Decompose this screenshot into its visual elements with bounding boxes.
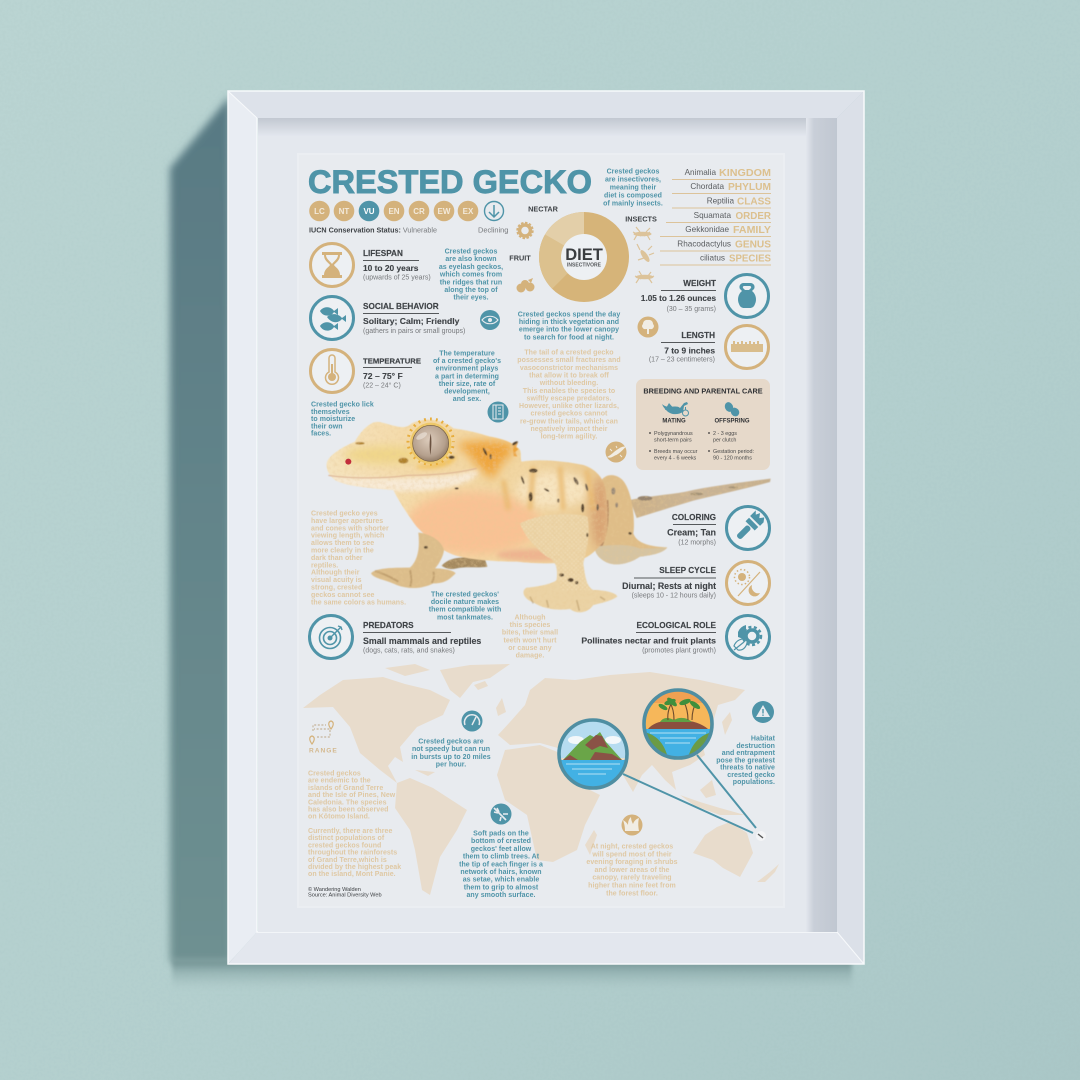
blurb: insectivores: diet is composed [604,192,662,200]
blurb: range: on Kōtomo Island. [308,814,370,821]
blurb: daytime hiding: to search for food at night. [524,334,614,341]
blurb: soft pads: bottom of crested [471,838,531,845]
blurb: range: Caledonia. The species [308,799,387,806]
icon: tree [638,316,658,338]
temperature [310,350,421,392]
taxonomy table: KINGDOM [719,167,771,179]
panel: breeding and parental care: MATING [662,418,686,424]
blurb: eye structure: viewing length, which [311,533,384,540]
torso and head [327,420,607,563]
blurb: docile nature: most tankmates. [437,614,493,621]
orange crest patch [457,441,515,480]
blurb: tail: re-grow their tails, which can [520,418,618,425]
blurb: night foraging: At night, crested geckos [591,844,673,850]
blurb: range: has also been observed [308,806,388,814]
care bullet lists: Polygynandrous [654,431,693,437]
care bullet lists [649,431,754,462]
blurb: threats: populations. [733,779,775,786]
blurb: tail: The tail of a crested gecko [524,350,614,356]
blurb: soft pads: Soft pads on the [473,830,529,838]
ecological role [581,616,770,658]
conservation status: Declining [478,226,508,234]
blurb: range: are endemic to the [308,778,371,785]
taxonomy table: ciliatus [700,254,725,262]
blurb: eye structure: and cones with shorter [311,525,389,532]
blurb: daytime hiding: emerge into the lower canopy [519,327,619,334]
blurb: threats: Habitat [751,736,776,742]
blurb: soft pads: the tip of each finger is a [459,861,543,868]
credits: © Wandering Walden [308,886,361,893]
taxonomy table: Squamata [694,211,731,220]
blurb: soft pads: network of hairs, known [460,869,542,876]
blurb: night foraging: the forest floor. [606,890,658,897]
blurb: temperature: a part in determing [435,373,499,380]
blurb: tail: negatively impact their [530,426,608,433]
blurb: docile nature: The crested geckos' [431,592,499,598]
blurb: self licking: faces. [311,431,331,438]
temperature: (22 – 24° C) [363,382,401,390]
blurb: tail: long-term agility. [541,434,597,441]
taxonomy table: Gekkonidae [685,225,729,234]
weight: WEIGHT [683,279,716,288]
panel: breeding and parental care: OFFSPRING [714,418,750,424]
blurb: temperature: development, [444,388,490,396]
tail [630,479,771,518]
blurb: eye structure: geckos cannot see [311,592,375,599]
body shading [329,441,609,561]
blurb: range: islands of Grand Terre [308,785,383,792]
diet labels and icons: FRUIT [509,254,531,262]
blurb: night foraging: evening foraging in shrubs [586,859,678,866]
blurb: soft pads: them to climb trees. At [463,854,540,861]
blurb: bites: Although [514,614,546,622]
blurb: eyelash geckos: Crested geckos [445,248,497,256]
icon: stork [662,402,688,416]
callout lines to New Caledonia [623,755,766,841]
blurb: bites: or cause any [508,645,552,652]
length: (17 – 23 centimeters) [649,356,715,364]
length: LENGTH [681,331,715,340]
blurb: self licking: Crested gecko lick [311,402,374,408]
blurb: docile nature: them compatible with [429,607,501,614]
ecological role: ECOLOGICAL ROLE [637,621,717,630]
picture frame [228,91,864,964]
blurb: eye structure: Crested gecko eyes [311,510,378,518]
range heading and icon [309,721,338,754]
icon: book [488,402,508,422]
ecological role: Pollinates nectar and fruit plants [581,636,716,646]
blurb: eye structure: the same colors as humans. [311,599,406,606]
predators: Small mammals and reptiles [363,636,481,646]
blurb: eyelash geckos: along the top of [444,287,498,294]
ecological role: (promotes plant growth) [642,648,716,654]
blurb: speed: not speedy but can run [412,746,490,753]
blurb: night foraging: higher than nine feet from [588,882,676,890]
blurb: range: on the island, Mont Panie. [308,871,396,878]
blurb: soft pads: as setae, which enable [463,877,539,884]
blurb: bites: damage. [516,652,544,660]
panel: breeding and parental care [636,379,770,470]
blurb: night foraging: and lower areas of the [594,867,670,874]
coloring: Cream; Tan [667,528,716,538]
predators: PREDATORS [363,621,414,630]
blurb: bites: teeth won't hurt [503,637,557,644]
diet labels and icons [509,204,657,292]
care bullet lists: short-term pairs [654,438,692,444]
taxonomy table: Animalia [685,168,716,177]
taxonomy table: Reptilia [707,196,734,206]
icon: gecko foot [490,804,512,824]
range heading and icon: RANGE [309,748,338,754]
blurb: eye structure: more clearly in the [311,548,374,554]
blurb: speed: in bursts up to 20 miles [411,754,491,761]
blurb: bites: bites, their small [502,630,558,637]
blurb: threats: and entrapment [722,750,776,757]
blurb: tail: without bleeding. [539,380,598,387]
blurb: daytime hiding: Crested geckos spend the day [518,312,620,318]
blurb: eyelash geckos: are also known [445,256,497,263]
nostril [345,459,351,465]
callout: island one [558,719,628,790]
near front leg [520,514,617,612]
length: 7 to 9 inches [664,346,715,356]
blurb: threats: crested gecko [727,772,775,779]
callout: island two [643,689,713,761]
blurb: tail: crested geckos cannot [531,411,608,418]
sleep cycle: (sleeps 10 - 12 hours daily) [632,592,716,600]
blurb: temperature: environment plays [436,366,498,373]
skin spots [355,441,738,584]
blurb: tail: vasoconstrictor mechanisms [520,365,618,372]
blurb: eyelash geckos: as eyelash geckos, [439,264,503,271]
lifespan: 10 to 20 years [363,263,419,273]
neck spikes [513,443,519,457]
coloring: COLORING [672,513,716,522]
world map [303,664,779,895]
blurb: threats: destruction [736,743,775,750]
blurb: tail: This enables the species to [523,388,615,395]
blurb: range: crested geckos found [308,842,381,849]
blurb: temperature: and sex. [453,396,481,403]
blurb: range: of Grand Terre,which is [308,857,387,864]
blurb: range: distinct populations of [308,835,385,842]
credits: Source: Animal Diversity Web [308,892,382,898]
care bullet lists: Gestation period: [713,449,754,455]
blurb: eyelash geckos: which comes from [439,272,502,279]
conservation status: EN [388,207,400,216]
blurb: soft pads: any smooth surface. [466,892,536,899]
weight: 1.05 to 1.26 ounces [641,294,716,303]
title: CRESTED GECKO [308,164,592,200]
blurb: threats: threats to native [720,764,775,772]
taxonomy table: SPECIES [729,252,771,264]
blurb: insectivores: of mainly insects. [603,200,663,208]
blurb: docile nature: docile nature makes [431,599,499,606]
blurb: self licking: themselves [311,409,350,416]
social behavior: SOCIAL BEHAVIOR [363,302,439,311]
coloring [667,506,770,550]
care bullet lists: every 4 - 6 weeks [654,456,697,462]
blurb: eye structure: visual acuity is [311,577,362,584]
care bullet lists: per clutch [713,438,736,444]
blurb: range: Currently, there are three [308,828,392,835]
blurb: night foraging: canopy, rarely traveling [592,875,672,882]
blurb: eye structure: have larger apertures [311,518,383,525]
blurb: insectivores: Crested geckos [607,168,659,176]
blurb: range: Crested geckos [308,770,361,778]
left front leg [371,533,456,588]
taxonomy table: ORDER [736,210,771,222]
conservation status: NT [339,207,349,216]
lifespan: (upwards of 25 years) [363,274,431,282]
care bullet lists: 90 - 120 months [713,456,752,462]
diet donut chart: DIET [565,246,603,264]
blurb: temperature: their size, rate of [439,381,496,388]
blurb: temperature: of a crested gecko's [433,358,501,365]
temperature: 72 – 75° F [363,371,403,381]
care bullet lists: Breeds may occur [654,449,698,455]
blurb: tail: However, unlike other lizards, [519,403,619,410]
icon: speedometer [462,710,482,732]
taxonomy table: Chordata [690,182,724,191]
social behavior: (gathers in pairs or small groups) [363,328,465,335]
diet labels and icons: INSECTS [625,214,657,224]
hind leg [595,475,667,564]
blurb: bites: this species [510,622,550,629]
sleep cycle: Diurnal; Rests at night [622,581,716,591]
coloring: (12 morphs) [678,540,716,546]
blurb: tail: that allow it to break off [529,372,610,379]
blurb: daytime hiding: hiding in thick vegetation and [519,319,619,326]
blurb: soft pads: them to grip to almost [464,884,539,891]
poster panel [299,155,783,906]
diet donut chart: INSECTIVORE [567,262,602,268]
blurb: night foraging: will spend most of their [591,851,672,858]
taxonomy table: PHYLUM [728,181,771,193]
gecko illustration [327,419,771,612]
blurb: range: throughout the rainforests [308,850,397,857]
blurb: eye structure: reptiles. [311,562,338,569]
blurb: eye structure: dark than other [311,555,363,562]
weight: (30 – 35 grams) [667,306,716,313]
conservation status [309,201,508,234]
far front leg [442,557,487,569]
blurb: eye structure: Although their [311,570,360,577]
blurb: speed: Crested geckos are [418,738,484,746]
eye [410,423,451,464]
temperature: TEMPERATURE [363,356,421,366]
predators [310,616,481,658]
conservation status: IUCN Conservation Status: Vulnerable [309,226,437,234]
care bullet lists: 2 - 3 eggs [713,431,737,437]
conservation status: LC [314,207,325,216]
social behavior [310,296,465,340]
conservation status: VU [363,207,375,216]
icon: shrub [622,814,642,836]
sleep cycle [622,562,770,604]
blurb: eyelash geckos: their eyes. [453,295,489,302]
blurb: insectivores: meaning their [610,184,656,192]
taxonomy table: FAMILY [733,224,771,236]
diet labels and icons: NECTAR [528,204,559,214]
blurb: eyelash geckos: the ridges that run [440,279,502,286]
mouth line [328,468,477,478]
blurb: range: and the Isle of Pines, New [308,792,396,799]
icon: eye [480,310,500,330]
blurb: self licking: to moisturize [311,416,355,423]
blurb: temperature: The temperature [439,350,495,358]
length [649,326,768,368]
frame shadow [170,96,852,992]
lifespan: LIFESPAN [363,249,403,258]
diet donut chart [539,212,629,302]
icon: gecko badge [606,442,626,462]
conservation status: EX [463,207,474,216]
blurb: self licking: their own [311,423,343,430]
lifespan [310,244,431,286]
crest spikes around eye [408,419,453,464]
icon: eggs [723,401,741,418]
blurb: insectivores: are insectivores, [605,176,661,184]
blurb: speed: per hour. [436,762,466,769]
blurb: range: divided by the highest peak [308,864,401,871]
blurb: threats: pose the greatest [716,757,776,764]
sleep cycle: SLEEP CYCLE [659,566,717,575]
icon: alert [752,701,774,723]
social behavior: Solitary; Calm; Friendly [363,316,460,326]
taxonomy table: GENUS [735,238,771,250]
blurb: soft pads: geckos' feet allow [471,846,532,853]
blurb: tail: swiftly escape predators. [527,395,611,402]
taxonomy table: Rhacodactylus [677,240,731,248]
taxonomy table [660,167,771,266]
gecko skin parts [327,420,771,612]
conservation status: EW [438,207,451,216]
panel: breeding and parental care: BREEDING AND PARENTAL CARE [643,386,763,396]
taxonomy table: CLASS [737,196,771,208]
blurb: tail: possesses small fractures and [517,357,621,364]
weight [641,274,768,318]
conservation status: CR [413,207,425,216]
blurb: eye structure: strong, crested [311,584,362,592]
predators: (dogs, cats, rats, and snakes) [363,648,455,654]
blurb: eye structure: allows them to see [311,540,374,547]
